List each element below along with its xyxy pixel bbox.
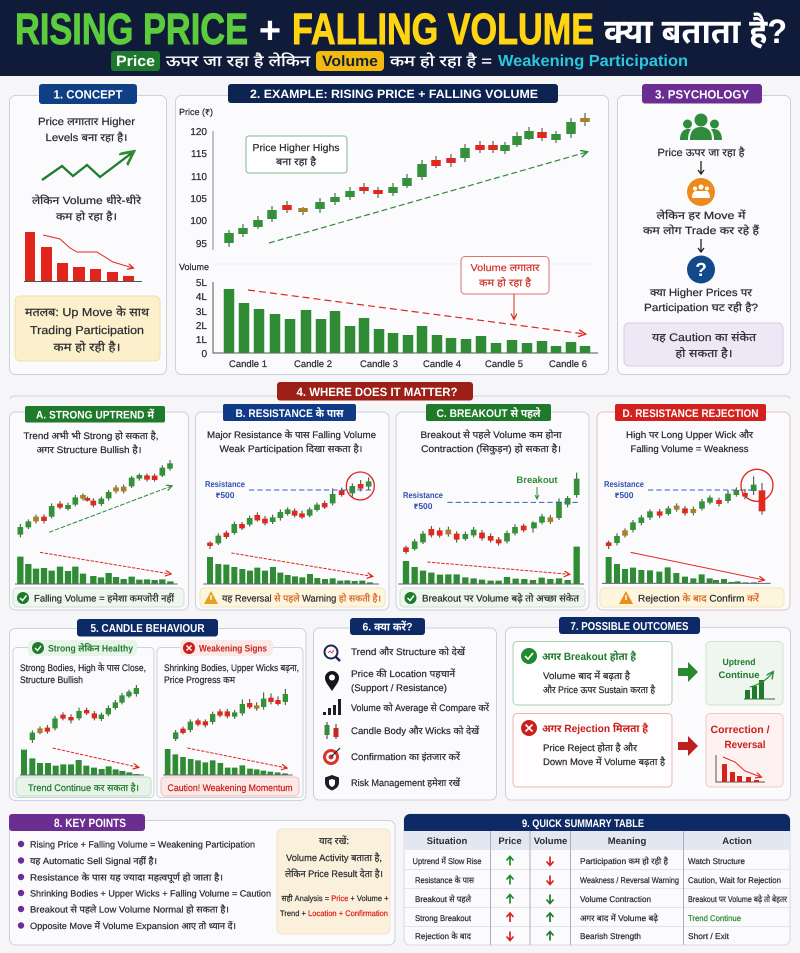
item: price location: [325, 668, 456, 694]
result: correction reversal: [706, 714, 783, 787]
row: after rejection: Rejection के बाद: [415, 931, 472, 941]
volume chart: Candle 3: [360, 359, 398, 370]
heading: key points: [9, 814, 145, 831]
text: price going up: Price ऊपर जा रहा है: [658, 146, 745, 159]
text: price higher levels: Price लगातार Higher: [38, 116, 136, 128]
text: fewer traders: लेकिन हर Move में: [656, 209, 746, 222]
text: participation question: Participation घट रही है?: [644, 301, 758, 314]
heading: A: [25, 406, 165, 422]
note: B: यह Reversal से पहले Warning हो सकती है।: [222, 592, 381, 604]
panel: 8 key points: [9, 814, 395, 945]
list: key points: यह Automatic Sell Signal नहीं है।: [30, 855, 157, 866]
row: uptrend slow rise: [412, 856, 745, 866]
volume chart: 4L: [196, 292, 207, 303]
panel: 6 what to do: [314, 618, 496, 800]
note: trend continue: [16, 777, 151, 796]
volume chart: Candle 5: [485, 359, 523, 370]
text: weakening description: [164, 663, 299, 686]
note: trend continue: Trend Continue कर सकता है।: [28, 782, 139, 794]
list: key points: [18, 840, 271, 931]
row: near resistance: Weakness / Reversal Warning: [580, 875, 679, 885]
heading: candle behaviour: [77, 619, 218, 636]
subtitle: Volume: [322, 53, 378, 70]
title banner: [0, 0, 800, 76]
heading: summary table: [404, 814, 790, 831]
callout: meaning: कम हो रही है।: [54, 340, 120, 354]
row: uptrend slow rise: Watch Structure: [688, 856, 745, 866]
volume chart: 5L: [196, 278, 207, 289]
heading: where does it matter: 4. WHERE DOES IT MATTER?: [296, 385, 458, 399]
text: price higher levels: Levels बना रहा है।: [46, 131, 128, 144]
callout: volume falling: Volume लगातार: [470, 263, 540, 274]
price chart: 115: [191, 149, 207, 160]
outcome: rejection: Price Reject होता है और: [543, 742, 638, 754]
table rows: [412, 856, 788, 941]
callout: remember: [277, 829, 390, 934]
item: risk management: Risk Management हमेशा रखें: [351, 777, 460, 789]
price chart: 110: [191, 172, 207, 183]
row: strong breakout: Trend Continue: [688, 913, 741, 923]
row: near resistance: [415, 875, 781, 885]
arrow: to uptrend: [678, 662, 698, 682]
text: weakening description: Shrinking Bodies, Upper Wicks बढ़ना,: [164, 663, 299, 674]
text: C description: Contraction (सिकुड़न) हो सकता है।: [421, 443, 561, 455]
item: trend and structure: [324, 646, 465, 661]
chart: healthy candles and volume: [20, 685, 144, 775]
heading: key points: 8. KEY POINTS: [54, 816, 126, 830]
trend arrow: price rising: [269, 152, 587, 243]
volume chart: 1L: [196, 335, 207, 346]
panel: 7 possible outcomes: [506, 617, 790, 800]
price chart: [179, 107, 587, 250]
heading: concept: 1. CONCEPT: [54, 88, 123, 102]
callout: caution signal: हो सकता है।: [676, 347, 732, 360]
item: trend and structure: Trend और Structure को देखें: [351, 646, 465, 658]
result: uptrend continue: Uptrend: [722, 657, 756, 667]
text: volume falling: कम हो रहा है।: [56, 210, 117, 223]
trend arrow: volume falling: [248, 290, 585, 334]
note: weakening momentum: [161, 777, 299, 796]
row: before breakout: Breakout पर Volume बढ़े तो बेहतर: [688, 894, 788, 904]
volume chart: Candle 1: [229, 359, 267, 370]
heading: example: [228, 84, 558, 103]
subtitle: [111, 51, 688, 71]
subtitle: Price: [116, 53, 155, 70]
item: candle body: [324, 722, 479, 739]
chart: falling red volume bars: [24, 232, 142, 282]
result: correction reversal: Reversal: [724, 739, 766, 751]
volume chart: Candle 6: [549, 359, 587, 370]
outcome: breakout: [513, 642, 672, 705]
callout: remember: Trend + Location + Confirmation: [280, 909, 388, 918]
sub-panel: healthy: [13, 640, 154, 798]
heading: what to do: 6. क्या करें?: [362, 620, 413, 634]
callout: higher highs: Price Higher Highs: [252, 143, 340, 154]
chip: strong healthy: Strong लेकिन Healthy: [48, 642, 134, 654]
callout: meaning: मतलब: Up Move के साथ: [25, 305, 150, 319]
heading: where does it matter: [277, 382, 473, 400]
icon: orange people circle: [687, 178, 715, 206]
note: D: [600, 588, 784, 607]
panel: 2 example: [176, 84, 608, 374]
subtitle: ऊपर जा रहा है लेकिन: [166, 52, 311, 70]
row: before breakout: [415, 894, 788, 904]
card B: near resistance: [196, 404, 389, 610]
list: key points: Opposite Move में Volume Expansion आए तो ध्यान दें।: [30, 920, 236, 931]
label: resistance D: ₹500: [614, 490, 634, 500]
chip: weakening signs: [180, 640, 273, 656]
panel: 9 quick summary table: [404, 814, 790, 945]
note: D: Rejection के बाद Confirm करें: [638, 592, 760, 604]
chip: strong healthy: [28, 640, 137, 656]
text: healthy description: Strong Bodies, High के पास Close,: [20, 662, 146, 674]
price chart: 100: [190, 216, 207, 227]
panel: 4 where does it matter: [10, 382, 790, 610]
arrow: to correction: [678, 736, 698, 756]
row: after rejection: Short / Exit: [688, 931, 730, 941]
price chart: 95: [196, 239, 207, 250]
note: A: Falling Volume = हमेशा कमजोरी नहीं: [34, 592, 175, 604]
item: risk management: [325, 775, 460, 790]
chart: C candles and volume: [398, 473, 584, 584]
heading: example: 2. EXAMPLE: RISING PRICE + FALLING VOLUME: [250, 87, 538, 101]
item: price location: Price की Location पहचानें: [351, 668, 456, 680]
panel: 5 candle behaviour: [10, 619, 306, 800]
chart: weakening candles and volume: [163, 689, 293, 775]
list: key points: Rising Price + Falling Volume = Weakening Participation: [30, 840, 255, 850]
row: before breakout: Volume Contraction: [580, 894, 651, 904]
row: near resistance: Resistance के पास: [415, 875, 474, 885]
subtitle: Weakening Participation: [498, 53, 688, 70]
price chart: Price (₹): [179, 107, 213, 117]
text: A description: अगर Structure Bullish है।: [36, 444, 142, 456]
table header row: Action: [722, 836, 752, 847]
item: confirmation: [323, 748, 461, 765]
icon: question circle: [687, 256, 715, 284]
text: D description: [626, 429, 754, 455]
heading: D: D. RESISTANCE REJECTION: [622, 408, 759, 420]
callout: higher highs: बना रहा है: [276, 156, 317, 168]
note: C: [400, 588, 585, 607]
callout: remember: Volume Activity बताता है,: [286, 852, 382, 864]
row: after rejection: Bearish Strength: [580, 931, 641, 941]
card D: resistance rejection: [597, 404, 790, 610]
title: RISING PRICE: [15, 5, 248, 54]
callout: higher highs: [246, 136, 347, 173]
row: strong breakout: [415, 913, 741, 923]
callout: caution signal: [624, 323, 783, 366]
label: breakout arrow: [516, 475, 558, 499]
text: fewer traders: कम लोग Trade कर रहे हैं: [643, 224, 759, 237]
label: resistance B: Resistance: [205, 479, 245, 489]
callout: caution signal: यह Caution का संकेत: [652, 331, 757, 344]
chart: B candles and volume: [203, 472, 379, 584]
list: key points: Breakout से पहले Low Volume Normal हो सकता है।: [30, 904, 229, 914]
text: participation question: [644, 287, 758, 314]
table header row: Volume: [534, 836, 567, 847]
label: resistance C: Resistance: [403, 490, 443, 500]
table header row: Situation: [427, 836, 468, 847]
text: D description: High पर Long Upper Wick और: [626, 429, 754, 441]
volume chart: 2L: [196, 321, 207, 332]
card C: before breakout: [396, 404, 589, 610]
text: weakening description: Price Progress कम: [164, 675, 235, 686]
label: resistance B: ₹500: [215, 490, 235, 500]
outcome: rejection: अगर Rejection मिलता है: [542, 722, 649, 735]
item: volume compare: [323, 699, 490, 715]
chart: D candles and volume: [602, 469, 773, 583]
panel: 1 concept: [10, 84, 166, 374]
outcome: breakout: Volume बाद में बढ़ता है: [543, 670, 631, 682]
heading: what to do: [350, 618, 425, 635]
text: fewer traders: [643, 209, 759, 237]
volume chart: Volume: [179, 262, 209, 272]
label: breakout arrow: Breakout: [516, 475, 558, 486]
heading: possible outcomes: 7. POSSIBLE OUTCOMES: [570, 621, 689, 633]
callout: volume falling: कम हो रहा है: [479, 277, 532, 289]
item: volume compare: Volume को Average से Compare करें: [351, 702, 490, 714]
list: key points: Shrinking Bodies + Upper Wicks + Falling Volume = Caution: [30, 888, 271, 898]
heading: B: [223, 404, 356, 421]
price chart: 120: [190, 127, 207, 138]
title: FALLING VOLUME: [292, 5, 594, 54]
callout: remember: सही Analysis = Price + Volume +: [282, 893, 389, 903]
heading: C: C. BREAKOUT से पहले: [436, 407, 541, 420]
sub-panel: weakening: [157, 640, 303, 798]
row: uptrend slow rise: Participation कम हो रही है: [580, 856, 669, 866]
text: B description: [207, 429, 376, 455]
callout: remember: याद रखें:: [319, 835, 349, 847]
item: price location: (Support / Resistance): [351, 683, 447, 694]
outcome: breakout: अगर Breakout होता है: [542, 650, 637, 663]
label: resistance D: [604, 479, 644, 500]
text: C description: Breakout से पहले Volume कम होना: [420, 429, 562, 441]
text: participation question: क्या Higher Prices पर: [650, 287, 753, 299]
outcome: rejection: [513, 714, 672, 787]
callout: volume falling: [461, 256, 549, 319]
note: weakening momentum: Caution! Weakening Momentum: [168, 783, 293, 794]
row: near resistance: Caution, Wait for Rejection: [688, 875, 781, 885]
callout: remember: लेकिन Price Result देता है।: [285, 868, 383, 880]
volume chart: 3L: [196, 307, 207, 318]
text: A description: Trend अभी भी Strong हो सकता है,: [24, 430, 158, 442]
row: before breakout: Breakout से पहले: [415, 894, 471, 904]
panel: 3 psychology: [618, 84, 790, 374]
text: C description: [420, 429, 562, 455]
row: strong breakout: Strong Breakout: [415, 913, 472, 923]
text: healthy description: Structure Bullish: [20, 675, 83, 686]
heading: psychology: 3. PSYCHOLOGY: [655, 88, 749, 102]
price chart: 105: [190, 194, 207, 205]
text: B description: Major Resistance के पास Falling Volume: [207, 429, 376, 441]
outcome: breakout: और Price ऊपर Sustain करता है: [543, 684, 656, 696]
note: B: [200, 588, 385, 607]
heading: candle behaviour: 5. CANDLE BEHAVIOUR: [90, 623, 205, 635]
card A: strong uptrend: [10, 406, 188, 610]
chip: weakening signs: Weakening Signs: [199, 644, 267, 654]
item: candle body: Candle Body और Wicks को देखें: [351, 725, 479, 737]
table header row: Price: [498, 836, 522, 847]
callout: meaning: Trading Participation: [30, 325, 144, 337]
text: healthy description: [20, 662, 146, 686]
volume chart: Candle 2: [294, 359, 332, 370]
result: correction reversal: Correction /: [710, 724, 770, 736]
heading: B: B. RESISTANCE के पास: [236, 407, 344, 420]
row: uptrend slow rise: Uptrend में Slow Rise: [412, 856, 482, 866]
table header row: Meaning: [608, 836, 646, 847]
label: resistance B: [205, 479, 245, 500]
chart: A candles and volume: [15, 460, 178, 584]
arrow: down: [698, 161, 704, 174]
title: क्या बताता है?: [604, 12, 787, 51]
text: volume falling: [32, 194, 142, 223]
arrow: down: [698, 239, 704, 252]
title: [15, 5, 787, 54]
label: resistance C: [403, 490, 443, 511]
table header row: [404, 831, 790, 850]
text: D description: Falling Volume = Weakness: [630, 444, 749, 455]
text: A description: [24, 430, 158, 456]
label: resistance D: Resistance: [604, 479, 644, 489]
label: resistance C: ₹500: [413, 501, 433, 511]
volume chart: 0: [201, 349, 207, 360]
note: C: Breakout पर Volume बढ़े तो अच्छा संकेत: [422, 592, 580, 604]
heading: summary table: 9. QUICK SUMMARY TABLE: [522, 818, 644, 830]
heading: D: [615, 404, 766, 421]
icon: question circle: ?: [695, 260, 707, 281]
title: +: [259, 10, 281, 52]
item: confirmation: Confirmation का इंतजार करें: [351, 751, 461, 763]
row: after rejection: [415, 931, 730, 941]
list: key points: Resistance के पास यह ज्यादा महत्वपूर्ण हो जाता है।: [30, 872, 223, 884]
heading: concept: [39, 84, 137, 104]
subtitle: कम हो रहा है =: [390, 52, 492, 70]
text: price higher levels: [38, 116, 136, 144]
heading: A: A. STRONG UPTREND में: [36, 408, 155, 422]
outcome: rejection: Down Move में Volume बढ़ता है: [543, 756, 666, 768]
volume chart: Candle 4: [423, 359, 461, 370]
icon: group of people: [680, 114, 722, 140]
volume chart: [179, 256, 598, 370]
heading: C: [426, 404, 551, 421]
icon: rising zigzag arrow: [42, 152, 133, 180]
result: uptrend continue: Continue: [718, 670, 760, 681]
callout: meaning: [15, 296, 160, 361]
heading: psychology: [642, 84, 762, 104]
text: B description: Weak Participation दिखा सकता है।: [220, 443, 362, 455]
note: A: [13, 588, 184, 607]
result: uptrend continue: [706, 642, 783, 705]
heading: possible outcomes: [559, 617, 700, 634]
row: strong breakout: अगर बाद में Volume बढ़े: [580, 913, 658, 923]
text: volume falling: लेकिन Volume धीरे-धीरे: [32, 194, 142, 207]
